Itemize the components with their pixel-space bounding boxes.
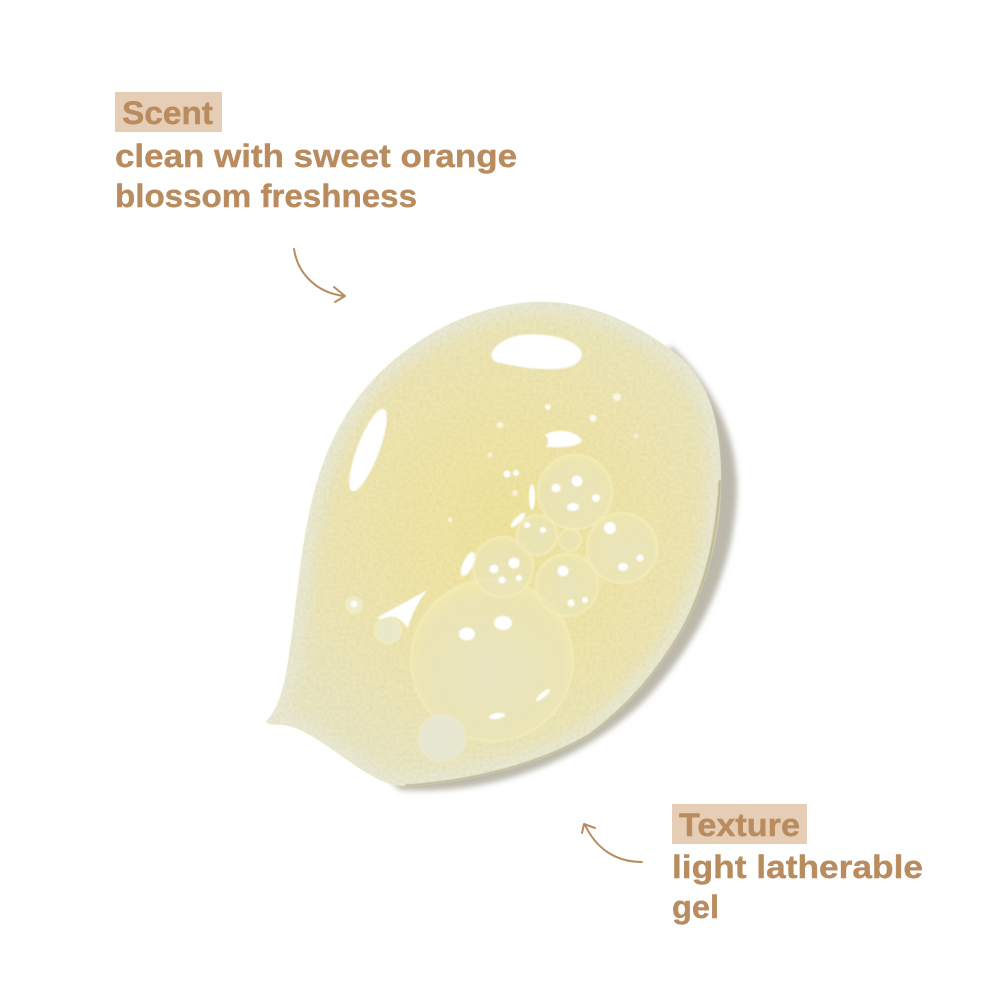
- panel: texture callout: [672, 804, 923, 925]
- text: scent description: blossom freshness: [115, 178, 417, 214]
- droplet body: [266, 302, 721, 786]
- image: gel droplet: [266, 302, 737, 791]
- droplet shadow: [380, 345, 737, 791]
- text: texture description: [672, 849, 923, 925]
- white highlights: [342, 334, 644, 720]
- heading: Scent: Scent: [122, 95, 213, 131]
- panel: scent callout: [115, 92, 517, 214]
- arrow: scent pointing to gel: [294, 249, 345, 302]
- bubbles: [346, 455, 657, 762]
- text: scent description: clean with sweet orange: [115, 138, 517, 174]
- text: scent description: [115, 138, 517, 214]
- label highlight: Texture: [672, 804, 807, 844]
- label highlight: Scent: [115, 92, 222, 132]
- droplet texture: [266, 302, 721, 786]
- heading: Texture: Texture: [679, 807, 800, 843]
- pale droplet rim: [266, 302, 721, 786]
- text: texture description: light latherable: [672, 849, 923, 885]
- arrow: texture pointing to gel: [582, 824, 642, 862]
- text: texture description: gel: [672, 889, 719, 925]
